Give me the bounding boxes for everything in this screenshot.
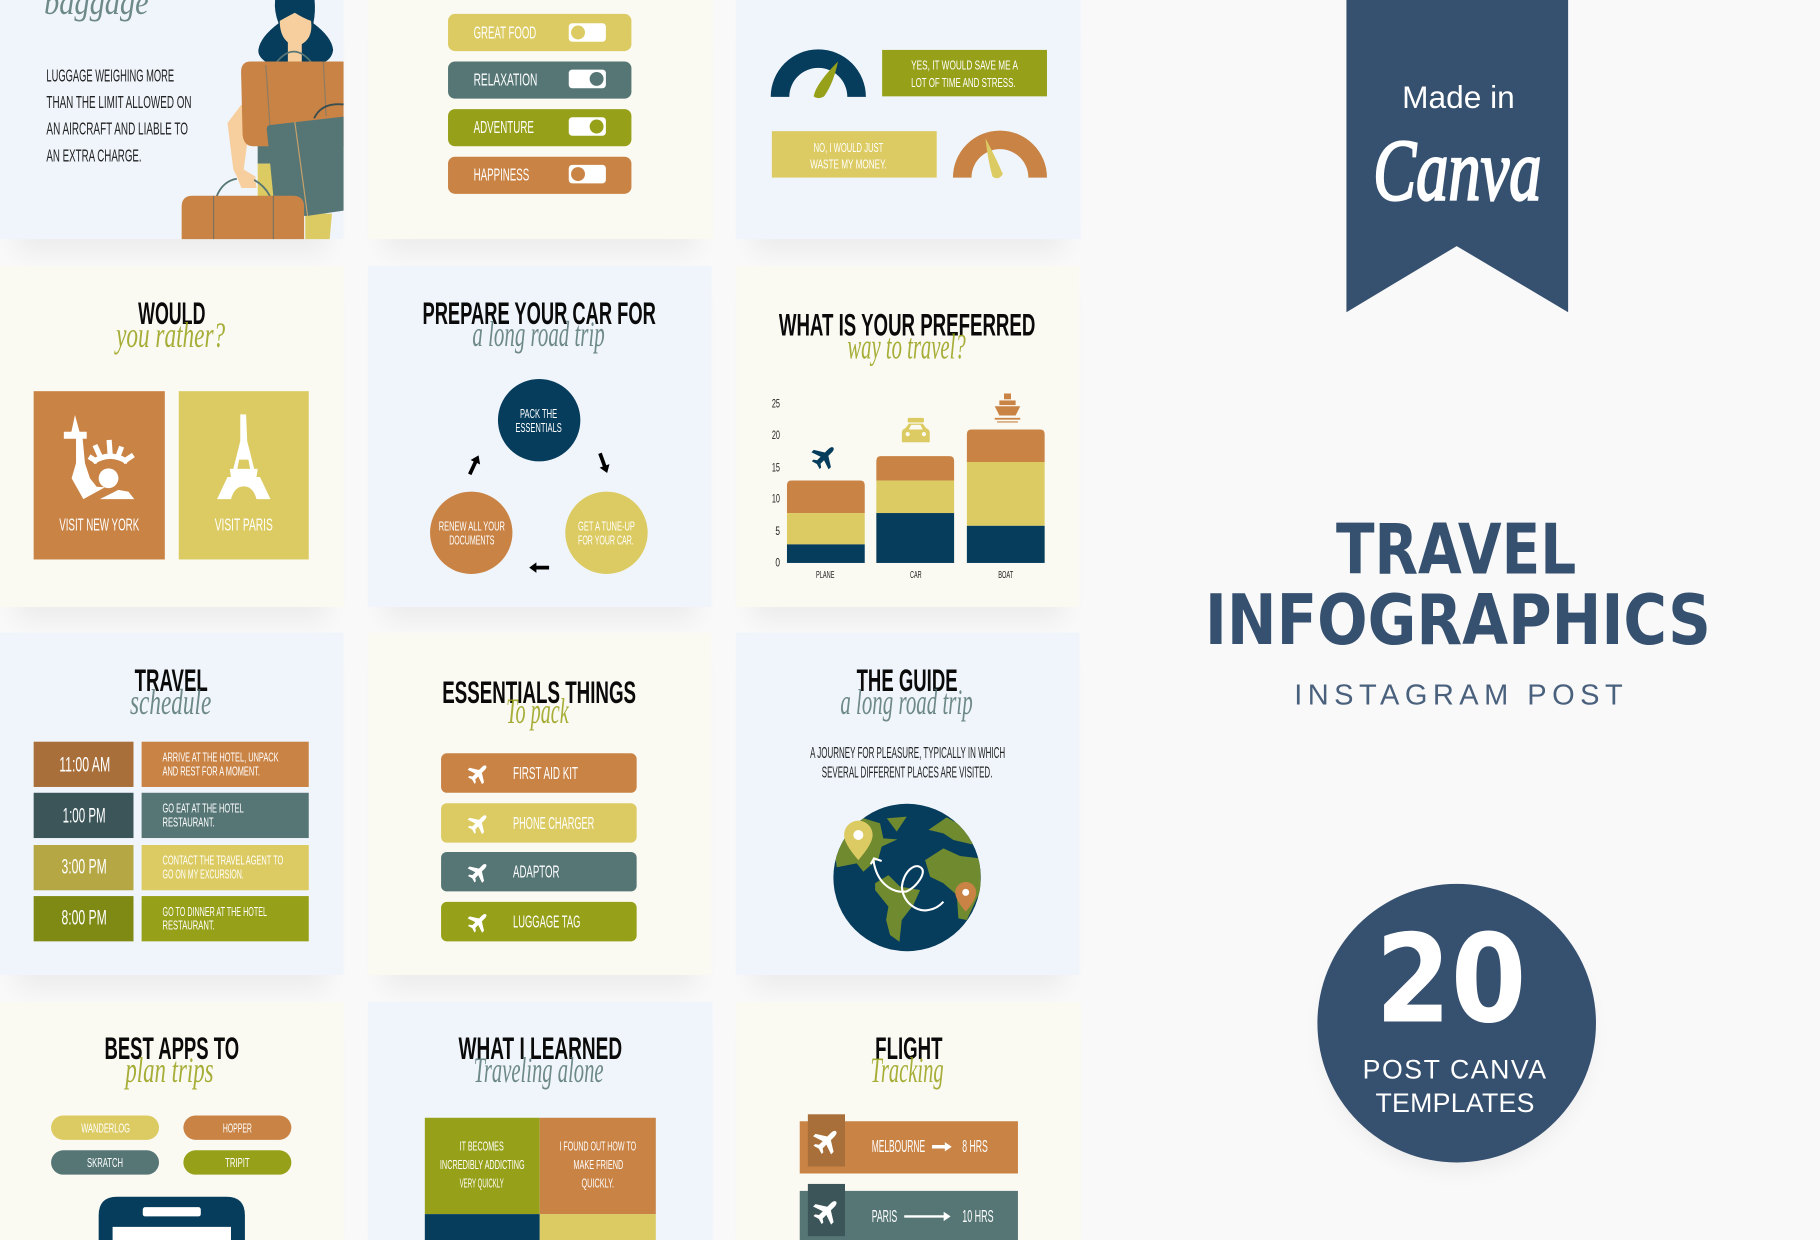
toggle: adventure: ADVENTURE	[474, 117, 534, 137]
title: THE GUIDE	[857, 663, 958, 698]
row: 8:00 PM: GO TO DINNER AT THE HOTEL	[162, 904, 267, 919]
flight: melbourne: MELBOURNE	[872, 1136, 925, 1156]
panel: gauges poll	[736, 0, 1081, 253]
app: tripit	[183, 1150, 291, 1175]
title: WOULD	[138, 296, 205, 331]
banner: made in canva	[1346, 0, 1568, 312]
script subtitle: plan trips	[123, 1050, 214, 1090]
toggle: great food: GREAT FOOD	[474, 22, 536, 42]
bar: boat	[967, 429, 1045, 563]
definition text: THAN THE LIMIT ALLOWED ON	[46, 92, 192, 112]
panel: prepare your car	[368, 266, 712, 621]
app: skratch	[51, 1150, 159, 1175]
title: ESSENTIALS THINGS	[442, 675, 636, 710]
cell: make friend: QUICKLY.	[582, 1175, 614, 1190]
banner: made in canva: Canva	[1373, 122, 1541, 220]
icon: statue of liberty	[64, 415, 134, 499]
panel: what i learned	[368, 1002, 713, 1240]
main title: INFOGRAPHICS	[1205, 580, 1711, 661]
cell: make friend: MAKE FRIEND	[573, 1157, 623, 1172]
row: 8:00 PM	[34, 896, 309, 941]
bar: car	[876, 456, 954, 563]
flight: paris	[800, 1184, 1018, 1240]
toggle: relaxation: RELAXATION	[474, 69, 537, 89]
bar: plane	[787, 481, 865, 563]
option: yes: YES, IT WOULD SAVE ME A	[911, 58, 1018, 73]
flight: paris: PARIS	[872, 1206, 897, 1226]
panel: flight tracking	[736, 1002, 1081, 1240]
script subtitle: a long road trip	[840, 682, 973, 722]
panel: preferred way to travel chart	[736, 266, 1079, 621]
arrow: up right	[465, 453, 483, 477]
item: luggage tag	[441, 902, 637, 941]
step: pack the essentials: PACK THE	[520, 406, 557, 421]
item: phone charger: PHONE CHARGER	[513, 813, 594, 833]
app: hopper: HOPPER	[223, 1120, 252, 1135]
item: phone charger	[441, 803, 637, 843]
panel: travel schedule	[0, 633, 344, 989]
step: renew documents: DOCUMENTS	[449, 532, 495, 547]
badge: 20 post canva templates	[1317, 884, 1596, 1167]
app: wanderlog	[51, 1115, 159, 1140]
cell: addicting: IT BECOMES	[460, 1138, 504, 1153]
panel: toggle switches	[368, 0, 713, 253]
panel: the guide	[736, 633, 1079, 989]
cell: addicting	[425, 1118, 540, 1214]
description: A JOURNEY FOR PLEASURE, TYPICALLY IN WHICH	[810, 745, 1005, 762]
flight: melbourne	[800, 1114, 1018, 1173]
app: hopper	[183, 1115, 291, 1140]
step: get a tune-up: FOR YOUR CAR.	[578, 532, 634, 547]
y axis labels: 25	[772, 397, 780, 410]
toggle: great food	[448, 14, 631, 51]
y axis labels: 10	[772, 493, 780, 506]
row: 3:00 PM: CONTACT THE TRAVEL AGENT TO	[162, 853, 283, 868]
badge: 20 post canva templates: 20	[1375, 908, 1526, 1050]
row: 3:00 PM	[34, 845, 309, 890]
row: 8:00 PM: 8:00 PM	[62, 907, 107, 930]
title: PREPARE YOUR CAR FOR	[423, 296, 656, 331]
row: 11:00 AM: AND REST FOR A MOMENT.	[162, 763, 260, 778]
cell: navy	[425, 1214, 540, 1240]
icon: car	[902, 418, 930, 442]
option: New York	[34, 391, 165, 559]
arrow: left	[529, 562, 549, 573]
cell: addicting: INCREDIBLY ADDICTING	[440, 1157, 525, 1172]
panel: would you rather	[0, 266, 344, 621]
cell: addicting: VERY QUICKLY	[460, 1175, 504, 1190]
option: no: WASTE MY MONEY.	[810, 156, 887, 171]
app: tripit: TRIPIT	[225, 1155, 250, 1170]
icon: globe with pins	[833, 804, 981, 951]
illustration: woman with luggage	[182, 0, 344, 239]
cell: make friend: I FOUND OUT HOW TO	[559, 1138, 636, 1153]
badge: 20 post canva templates: TEMPLATES	[1375, 1088, 1534, 1118]
definition text: AN AIRCRAFT AND LIABLE TO	[46, 119, 188, 139]
cell: make friend	[540, 1118, 656, 1214]
definition text	[46, 65, 192, 165]
step: pack the essentials: ESSENTIALS	[515, 420, 562, 435]
icon: plane	[807, 439, 842, 474]
title: FLIGHT	[875, 1031, 942, 1066]
toggle: adventure	[448, 109, 631, 146]
step: get a tune-up	[565, 492, 648, 574]
description	[810, 745, 1005, 782]
toggle: happiness	[448, 157, 631, 194]
y axis labels: 5	[775, 525, 780, 538]
item: adaptor	[441, 852, 637, 891]
subtitle: INSTAGRAM POST	[1294, 680, 1623, 712]
option: no	[772, 131, 937, 178]
y axis labels: 15	[772, 461, 780, 474]
app: wanderlog: WANDERLOG	[81, 1120, 130, 1135]
icon: eiffel tower	[217, 414, 270, 499]
option: yes: LOT OF TIME AND STRESS.	[911, 75, 1016, 90]
toggle: relaxation	[448, 62, 631, 99]
row: 3:00 PM: 3:00 PM	[62, 855, 107, 878]
row: 8:00 PM: RESTAURANT.	[162, 918, 215, 933]
row: 11:00 AM: ARRIVE AT THE HOTEL, UNPACK	[162, 749, 279, 764]
x axis labels: CAR	[910, 570, 922, 581]
option: New York: VISIT NEW YORK	[59, 514, 139, 534]
y axis labels	[772, 397, 780, 569]
flight: paris: 10 HRS	[962, 1206, 994, 1226]
row: 3:00 PM: GO ON MY EXCURSION.	[162, 867, 244, 882]
x axis labels	[816, 570, 1014, 581]
icon: phone	[99, 1197, 245, 1240]
script subtitle: To pack	[506, 691, 569, 731]
row: 1:00 PM: 1:00 PM	[63, 804, 106, 827]
x axis labels: PLANE	[816, 570, 835, 581]
item: first aid kit	[441, 753, 637, 793]
panel: baggage definition	[0, 0, 344, 253]
option: Paris	[179, 391, 309, 559]
step: pack the essentials	[498, 379, 580, 461]
step: renew documents: RENEW ALL YOUR	[439, 518, 505, 533]
row: 1:00 PM: GO EAT AT THE HOTEL	[162, 801, 244, 816]
title: WHAT IS YOUR PREFERRED	[779, 307, 1035, 342]
title: WHAT I LEARNED	[458, 1031, 622, 1066]
flight: melbourne: 8 HRS	[962, 1136, 988, 1156]
app: skratch: SKRATCH	[87, 1155, 123, 1170]
item: adaptor: ADAPTOR	[513, 862, 559, 882]
option: no: NO, I WOULD JUST	[814, 140, 883, 155]
definition text: AN EXTRA CHARGE.	[46, 145, 142, 165]
script subtitle: Traveling alone	[474, 1050, 604, 1090]
script subtitle: a long road trip	[472, 314, 605, 354]
badge: 20 post canva templates: POST CANVA	[1363, 1054, 1546, 1084]
arrow: down right	[595, 452, 612, 475]
y axis labels: 20	[772, 429, 780, 442]
script subtitle: you rather?	[114, 315, 225, 355]
cell: yellow	[540, 1214, 656, 1240]
row: 11:00 AM: 11:00 AM	[59, 753, 110, 776]
item: luggage tag: LUGGAGE TAG	[513, 911, 580, 931]
script subtitle: Tracking	[871, 1050, 944, 1090]
x axis labels: BOAT	[998, 570, 1014, 581]
main title: TRAVEL	[1336, 509, 1576, 590]
option: Paris: VISIT PARIS	[215, 514, 273, 534]
panel: essentials to pack	[368, 633, 712, 989]
step: renew documents	[430, 492, 512, 574]
script subtitle: schedule	[130, 682, 211, 722]
definition text: LUGGAGE WEIGHING MORE	[46, 65, 174, 85]
title: TRAVEL	[135, 663, 208, 698]
main title	[1205, 509, 1711, 661]
gauge: orange	[953, 131, 1047, 178]
gauge: navy	[771, 49, 866, 98]
row: 1:00 PM: RESTAURANT.	[162, 814, 215, 829]
row: 1:00 PM	[34, 793, 309, 838]
option: yes	[882, 50, 1047, 96]
item: first aid kit: FIRST AID KIT	[513, 763, 578, 783]
banner: made in canva: Made in	[1402, 80, 1515, 115]
y axis labels: 0	[775, 556, 780, 569]
panel: best apps	[0, 1002, 344, 1240]
script subtitle: way to travel?	[847, 327, 966, 367]
row: 11:00 AM	[34, 742, 309, 787]
description: SEVERAL DIFFERENT PLACES ARE VISITED.	[822, 765, 992, 782]
toggle: happiness: HAPPINESS	[474, 164, 529, 184]
step: get a tune-up: GET A TUNE-UP	[578, 518, 635, 533]
icon: ship	[995, 393, 1020, 423]
title: BEST APPS TO	[104, 1031, 239, 1066]
